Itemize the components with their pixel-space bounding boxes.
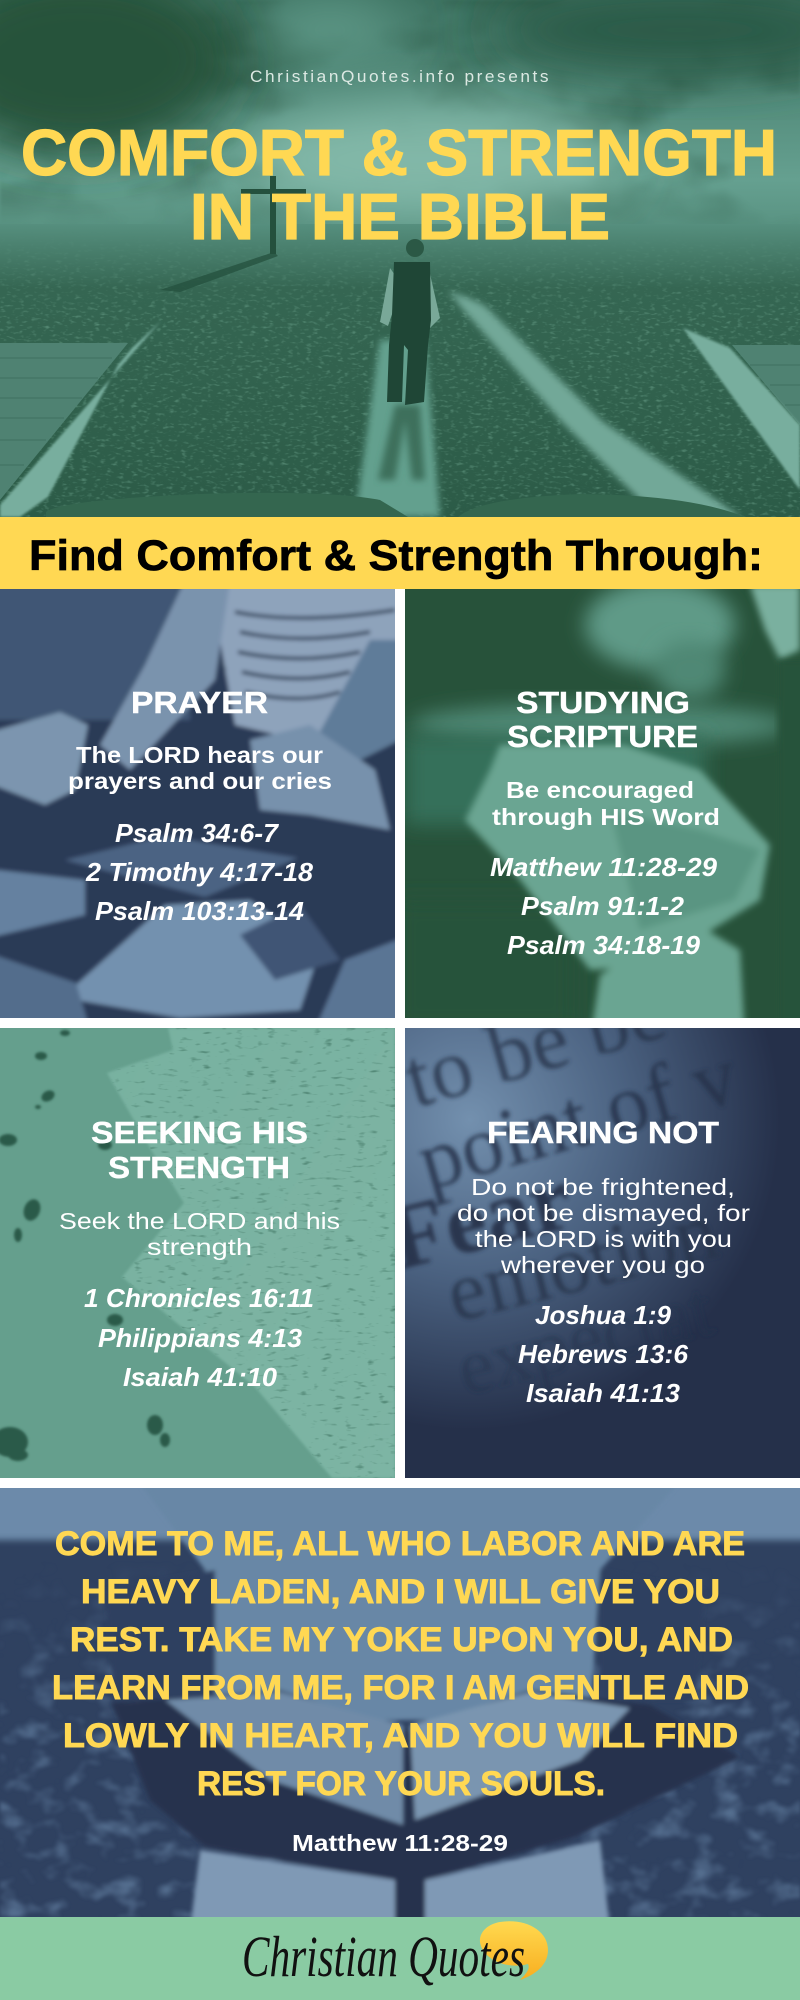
description: studying scripture <box>492 777 720 830</box>
verse references: prayer: 2 Timothy 4:17-18 <box>85 857 314 887</box>
heading: fearing not: FEARING NOT <box>487 1115 719 1150</box>
verse references: prayer: Psalm 103:13-14 <box>95 896 305 926</box>
heading: studying scripture: STUDYING <box>516 685 690 720</box>
title: COMFORT & STRENGTH <box>21 116 777 189</box>
title: IN THE BIBLE <box>190 180 610 253</box>
dirt road <box>447 292 740 517</box>
panel: seeking his strength <box>0 1028 395 1478</box>
subtitle band: Find Comfort & Strength Through: <box>29 532 763 580</box>
walking man <box>380 239 440 405</box>
quote text: LEARN FROM ME, FOR I AM GENTLE AND <box>52 1669 749 1707</box>
verse references: fearing not: Isaiah 41:13 <box>526 1378 681 1408</box>
description: fearing not: wherever you go <box>500 1252 705 1278</box>
verse references: studying scripture: Matthew 11:28-29 <box>490 852 718 882</box>
verse references: fearing not: Joshua 1:9 <box>535 1300 672 1330</box>
verse references: seeking his strength <box>84 1283 314 1392</box>
photo: blurred dictionary page: point of v <box>408 1029 747 1208</box>
verse references: seeking his strength: Isaiah 41:10 <box>123 1362 278 1392</box>
heading: studying scripture <box>507 685 698 754</box>
panel: fearing not <box>405 1028 800 1478</box>
description: fearing not: do not be dismayed, for <box>457 1200 750 1226</box>
description: seeking his strength <box>59 1208 340 1260</box>
description: prayer: prayers and our cries <box>68 768 332 794</box>
photo: blurred dictionary page <box>405 1028 800 1478</box>
verse references: prayer: Psalm 34:6-7 <box>115 818 280 848</box>
description: fearing not: the LORD is with you <box>475 1226 732 1252</box>
description: fearing not <box>457 1174 750 1278</box>
wood planks <box>0 343 128 500</box>
verse references: seeking his strength: Philippians 4:13 <box>98 1323 303 1353</box>
photo: hands in prayer over books <box>0 589 395 1018</box>
photo: blurred dictionary page: emotion <box>437 1184 727 1340</box>
photo: hand holding an open bible <box>395 580 800 1040</box>
photo: blurred dictionary page: expectat <box>448 1264 722 1411</box>
hero photo: path through an open book under a stormy sky <box>0 0 800 517</box>
description: studying scripture: through HIS Word <box>492 804 720 830</box>
icon: yellow speech bubble <box>480 1921 548 1980</box>
description: seeking his strength: Seek the LORD and his <box>59 1208 340 1234</box>
heading: seeking his strength <box>91 1115 308 1185</box>
panel: hero header <box>0 0 800 517</box>
panel: scripture quote <box>0 1470 800 1930</box>
quote citation: Matthew 11:28-29 <box>292 1830 508 1856</box>
quote text: REST FOR YOUR SOULS. <box>197 1765 605 1803</box>
cross <box>160 176 306 292</box>
photo: blurred dictionary page: to be be <box>395 964 676 1126</box>
verse references: seeking his strength: 1 Chronicles 16:11 <box>84 1283 314 1313</box>
description: studying scripture: Be encouraged <box>506 777 694 803</box>
heading: prayer: PRAYER <box>131 685 268 720</box>
quote text: REST. TAKE MY YOKE UPON YOU, AND <box>70 1621 733 1659</box>
heading: seeking his strength: SEEKING HIS <box>91 1115 308 1150</box>
subtitle band <box>0 517 800 589</box>
verse references: studying scripture <box>490 852 718 960</box>
verse references: studying scripture: Psalm 34:18-19 <box>507 930 701 960</box>
logo wordmark: Christian Quotes <box>242 1924 525 1989</box>
footer band with logo <box>0 1917 800 2000</box>
heading: studying scripture: SCRIPTURE <box>507 719 698 754</box>
description: seeking his strength: strength <box>147 1234 252 1260</box>
quote text: HEAVY LADEN, AND I WILL GIVE YOU <box>81 1573 720 1611</box>
quote text <box>52 1525 749 1803</box>
book page edges <box>0 321 161 517</box>
book bottom pages <box>46 493 408 517</box>
verse references: studying scripture: Psalm 91:1-2 <box>521 891 685 921</box>
verse references: fearing not <box>518 1300 689 1408</box>
verse references: prayer <box>85 818 314 926</box>
title <box>21 116 777 253</box>
panel: studying scripture <box>395 580 800 1040</box>
presents line: ChristianQuotes.info presents <box>250 67 551 86</box>
panel: prayer <box>0 589 395 1018</box>
photo: man holding an open bible in a field <box>0 1470 800 1930</box>
description: fearing not: Do not be frightened, <box>471 1174 735 1200</box>
description: prayer: The LORD hears our <box>76 742 323 768</box>
quote text: COME TO ME, ALL WHO LABOR AND ARE <box>55 1525 745 1563</box>
description: prayer <box>68 742 332 794</box>
quote text: LOWLY IN HEART, AND YOU WILL FIND <box>63 1717 738 1755</box>
photo: blurred dictionary page: Fear <box>378 1146 581 1289</box>
heading: seeking his strength: STRENGTH <box>108 1150 290 1185</box>
photo: footprints on a beach at the tide line <box>0 1028 395 1478</box>
verse references: fearing not: Hebrews 13:6 <box>518 1339 689 1369</box>
